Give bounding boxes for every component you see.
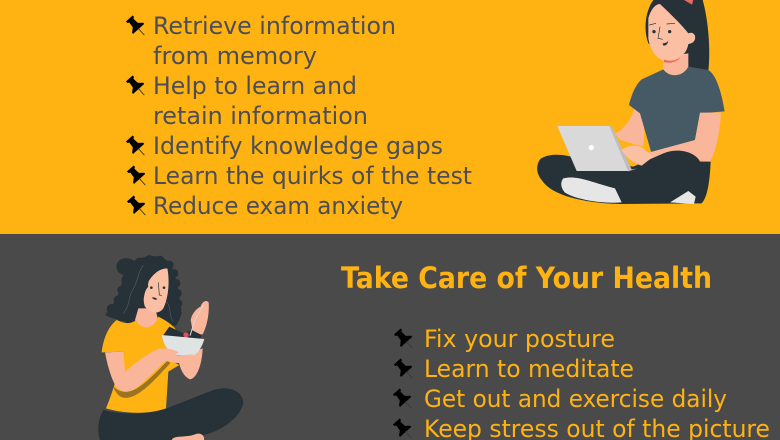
text: retain information: retain information <box>153 102 368 130</box>
laptop edge <box>609 126 637 171</box>
icon: pin <box>124 73 150 100</box>
hair curl on face <box>141 272 152 301</box>
arm behind laptop <box>615 107 645 147</box>
neck <box>135 308 158 328</box>
icon: pin <box>125 163 151 190</box>
neck shadow <box>664 57 681 63</box>
text: retrieve information: Retrieve information <box>153 12 396 40</box>
illustration: woman eating salad <box>98 255 243 440</box>
text: learn the quirks: Learn the quirks of the test <box>153 162 472 190</box>
icon: pin <box>391 386 417 413</box>
text: help to learn: Help to learn and <box>153 72 357 100</box>
text: reduce exam anxiety: Reduce exam anxiety <box>153 192 403 220</box>
text: learn to meditate: Learn to meditate <box>424 355 634 383</box>
hand under bowl <box>157 348 193 363</box>
panel: dark bottom section <box>0 234 780 440</box>
icon: pin <box>124 133 150 160</box>
face <box>648 4 695 61</box>
text: get out and exercise daily: Get out and exercise daily <box>424 385 727 413</box>
headband <box>684 0 693 5</box>
eyes and mouth <box>649 23 675 46</box>
hair bun and curls <box>105 255 182 327</box>
bullet list: health tips <box>391 325 770 440</box>
legs <box>537 151 711 204</box>
text: from memory: from memory <box>153 42 317 70</box>
icon: pin <box>392 356 418 383</box>
text: fix your posture: Fix your posture <box>424 325 615 353</box>
hair back <box>646 0 709 71</box>
foot <box>172 434 204 440</box>
berries <box>183 332 189 338</box>
neck <box>663 53 688 77</box>
spoon <box>190 305 203 336</box>
shirt shadow <box>113 360 170 398</box>
panel: yellow top section <box>0 0 780 234</box>
salad <box>163 327 202 340</box>
illustration: woman with laptop <box>537 0 725 204</box>
right arm and hand <box>178 301 209 379</box>
laptop logo <box>589 145 594 150</box>
text: identify knowledge gaps: Identify knowledge gaps <box>153 132 443 160</box>
laptop <box>557 126 628 171</box>
bowl <box>162 335 204 356</box>
icon: pin <box>125 193 151 220</box>
facial features <box>150 282 165 300</box>
sock right <box>670 191 696 204</box>
hair strands <box>123 265 173 322</box>
icon: pin <box>124 13 150 40</box>
heading: take care of your health: Take Care of Your Health <box>341 261 712 295</box>
left arm <box>105 348 178 391</box>
hand <box>622 146 653 166</box>
icon: pin <box>391 416 417 440</box>
face <box>144 268 169 313</box>
shirt <box>629 67 725 154</box>
bullet list: practice test benefits <box>124 12 472 220</box>
leggings <box>98 388 243 440</box>
sock left <box>561 177 622 203</box>
shirt <box>102 317 179 413</box>
icon: pin <box>392 326 418 353</box>
right arm <box>633 113 721 165</box>
